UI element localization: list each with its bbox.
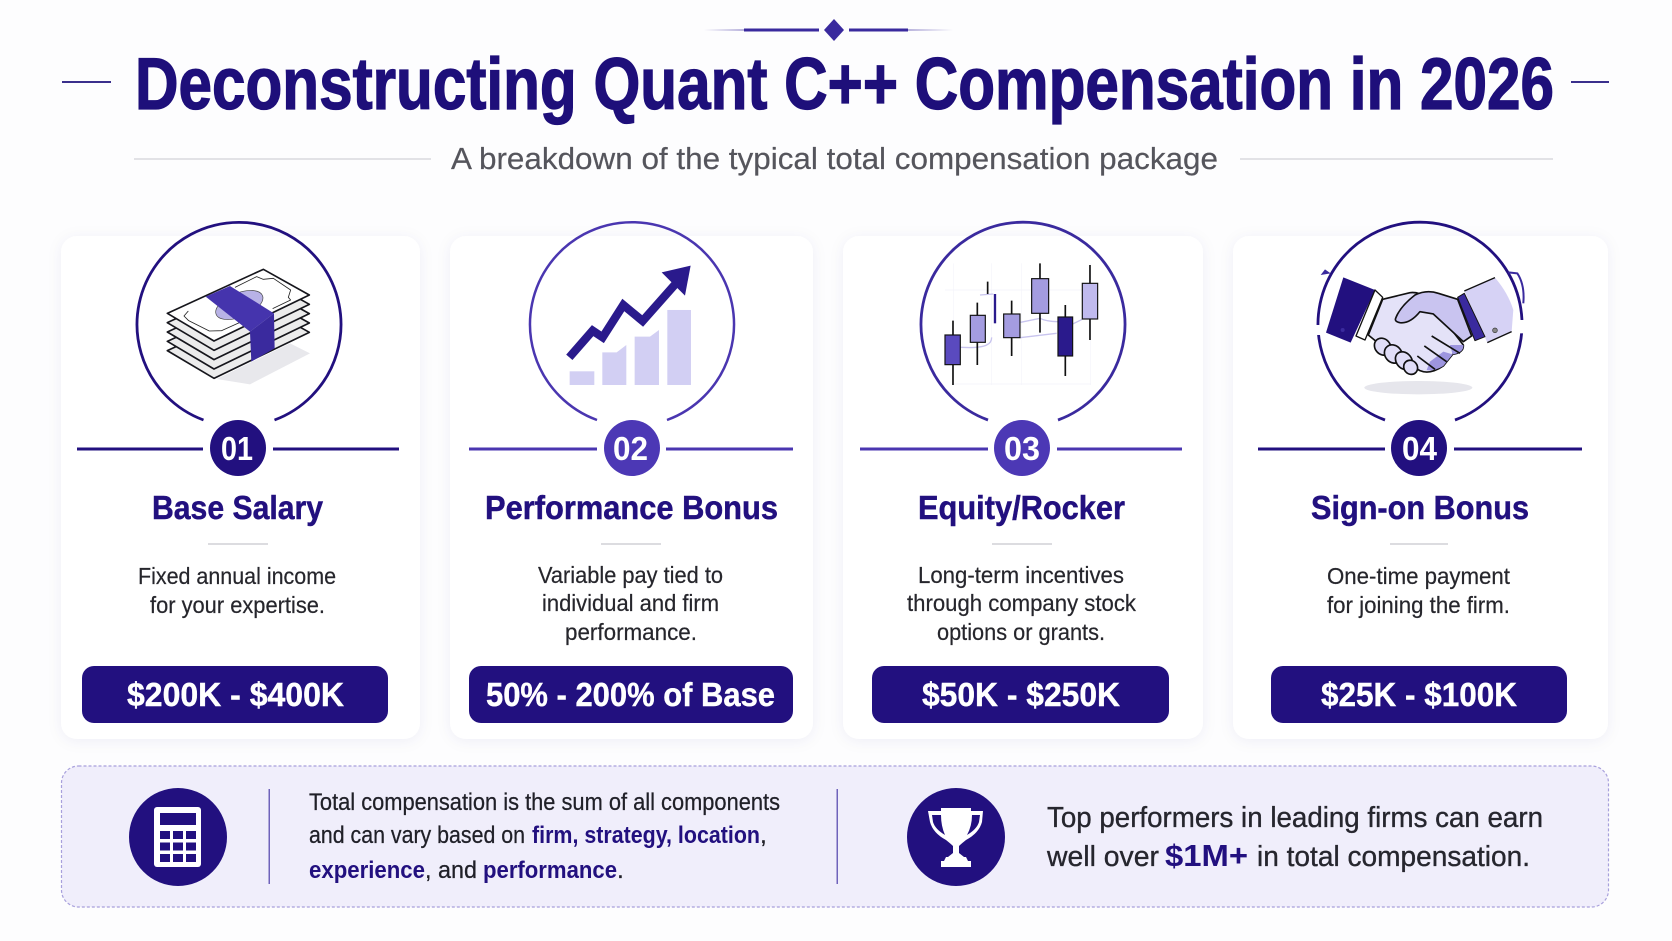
number badge 03 — [860, 420, 1182, 476]
description: base salary: Fixed annual income — [138, 563, 336, 589]
header ornament — [704, 19, 953, 41]
number badge 02 — [469, 420, 793, 476]
panel: base salary — [61, 222, 420, 739]
icon: candlestick chart — [945, 263, 1098, 385]
description: performance bonus — [538, 562, 723, 645]
text: total compensation note: experience — [309, 857, 425, 884]
number badge 03: 03 — [1004, 430, 1040, 467]
text: total compensation note: . — [617, 857, 624, 884]
text: total compensation note: firm, strategy, location — [532, 822, 760, 849]
heading: equity/rocker: Equity/Rocker — [918, 490, 1125, 527]
number badge 01 — [77, 420, 399, 476]
icon ring: sign-on bonus — [1318, 222, 1522, 420]
value pill: base salary: $200K - $400K — [127, 676, 344, 713]
panel: equity/rocker — [843, 222, 1203, 739]
text: top performers note — [1046, 802, 1543, 873]
text: top performers note: in total compensation. — [1257, 841, 1530, 873]
description: performance bonus: individual and firm — [542, 590, 719, 616]
value pill: sign-on bonus — [1271, 666, 1567, 723]
number badge 02: 02 — [613, 430, 648, 467]
icon: handshake — [1315, 269, 1525, 394]
icon: calculator — [129, 788, 227, 886]
icon ring: equity — [921, 222, 1125, 420]
number badge 04: 04 — [1402, 430, 1438, 467]
value pill: base salary — [82, 666, 388, 723]
description: equity/rocker: through company stock — [907, 590, 1136, 616]
number badge 04 — [1258, 420, 1582, 476]
description: sign-on bonus — [1327, 563, 1511, 618]
value pill: equity/rocker: $50K - $250K — [922, 676, 1120, 713]
panel: sign-on bonus — [1233, 222, 1608, 739]
icon ring: performance bonus — [530, 222, 734, 420]
panel: summary band — [62, 766, 1608, 907]
text: total compensation note: and can vary based on — [309, 822, 525, 849]
icon ring: base salary — [137, 222, 341, 420]
description: equity/rocker: options or grants. — [937, 619, 1105, 645]
text: top performers note: well over — [1046, 841, 1159, 873]
description: performance bonus: Variable pay tied to — [538, 562, 723, 588]
text: total compensation note: performance — [483, 857, 617, 884]
text: total compensation note: , — [760, 822, 767, 849]
description: sign-on bonus: for joining the firm. — [1327, 592, 1510, 618]
heading: base salary: Base Salary — [152, 490, 323, 527]
heading: sign-on bonus: Sign-on Bonus — [1311, 490, 1529, 527]
text: top performers note: $1M+ — [1165, 838, 1248, 873]
icon: rising arrow over bars — [569, 266, 691, 385]
icon: trophy — [907, 788, 1005, 886]
description: equity/rocker: Long-term incentives — [918, 562, 1124, 588]
value pill: performance bonus — [469, 666, 793, 723]
description: equity/rocker — [907, 562, 1136, 645]
value pill: sign-on bonus: $25K - $100K — [1321, 676, 1517, 713]
text: total compensation note — [309, 789, 780, 884]
panel: performance bonus — [450, 222, 813, 739]
text: total compensation note: Total compensation is the sum of all components — [309, 789, 780, 816]
heading: performance bonus: Performance Bonus — [485, 490, 778, 527]
value pill: equity/rocker — [872, 666, 1169, 723]
subtitle: A breakdown of the typical total compensation package — [451, 142, 1218, 176]
text: total compensation note: , and — [425, 857, 477, 884]
description: sign-on bonus: One-time payment — [1327, 563, 1511, 589]
number badge 01: 01 — [221, 430, 253, 467]
description: base salary: for your expertise. — [150, 592, 325, 618]
description: performance bonus: performance. — [565, 619, 697, 645]
text: top performers note: Top performers in leading firms can earn — [1047, 802, 1543, 834]
value pill: performance bonus: 50% - 200% of Base — [486, 676, 775, 713]
description: base salary — [138, 563, 336, 618]
icon: stack of money — [167, 269, 310, 384]
